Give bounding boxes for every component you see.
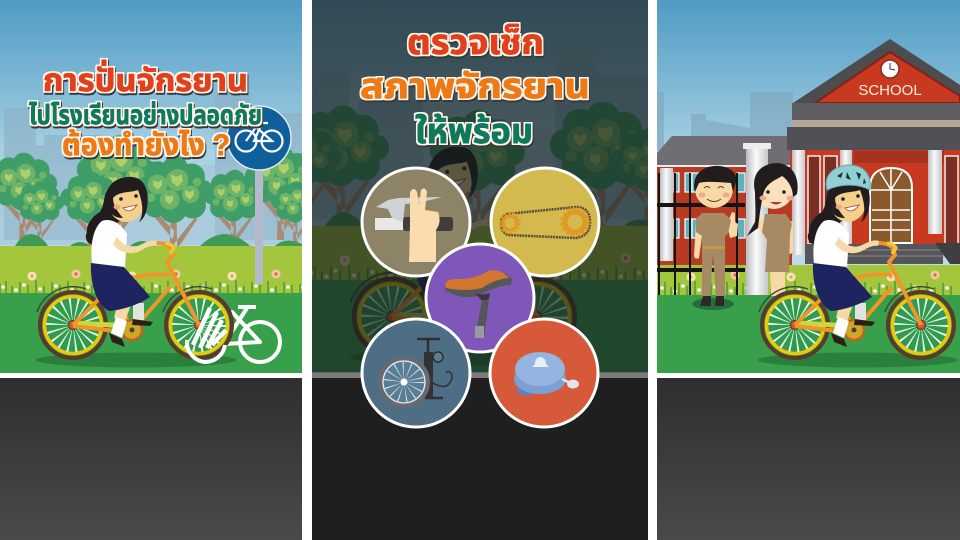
front steps [805,243,960,264]
main school building [787,39,960,264]
heading: panel 2 line 1: ตรวจเช็ก [407,23,544,62]
panel: riding to school safely [0,0,302,373]
icon: road bicycle marking [227,305,282,364]
panel: arriving at school [657,0,960,373]
icon circle: bicycle saddle [426,244,534,352]
rider: student [86,177,157,347]
shadow under bicycle [758,352,958,368]
bicycle helmet [826,165,870,190]
scene: darkened park with rider [312,0,648,372]
white bicycle marking over wheel [187,308,226,362]
trees [0,135,302,246]
bicycle [37,243,232,358]
fence [657,173,745,295]
heading: panel 1 line 2: ไปโรงเรียนอย่างปลอดภัย [29,100,262,130]
school sign: SCHOOL [858,82,922,99]
icon circle: chain and gears [491,168,599,276]
teacher: man [692,166,738,310]
teacher: woman [747,163,798,296]
clock [881,60,899,78]
heading: panel 1 line 1: การปั่นจักรยาน [43,59,248,98]
road: panel 3 [657,378,960,540]
icon circle: brake lever check [362,168,470,276]
sky [657,0,960,265]
arched window [870,168,912,243]
icon circle: tyre pump and wheel [362,319,470,427]
icon circle: bicycle bell [490,319,598,427]
scene: sky and skyline [0,0,302,246]
city skyline [657,92,793,150]
heading: panel 1 line 3: ต้องทำยังไง ? [62,129,230,162]
road: panel 1 [0,378,302,540]
icon: bicycle road sign [227,106,291,284]
white gate pillar [743,143,771,295]
lawn [657,265,960,373]
heading: panel 2 line 2: สภาพจักรยาน [360,67,590,106]
lawn and road verge [0,234,302,373]
bicycle and student with helmet [759,165,954,358]
shadow under bicycle [36,352,236,368]
panel: check bicycle condition [312,0,648,373]
dark overlay [312,0,648,373]
road: panel 2 [312,373,648,540]
left school wing [657,136,792,265]
heading: panel 2 line 3: ให้พร้อม [415,112,533,151]
